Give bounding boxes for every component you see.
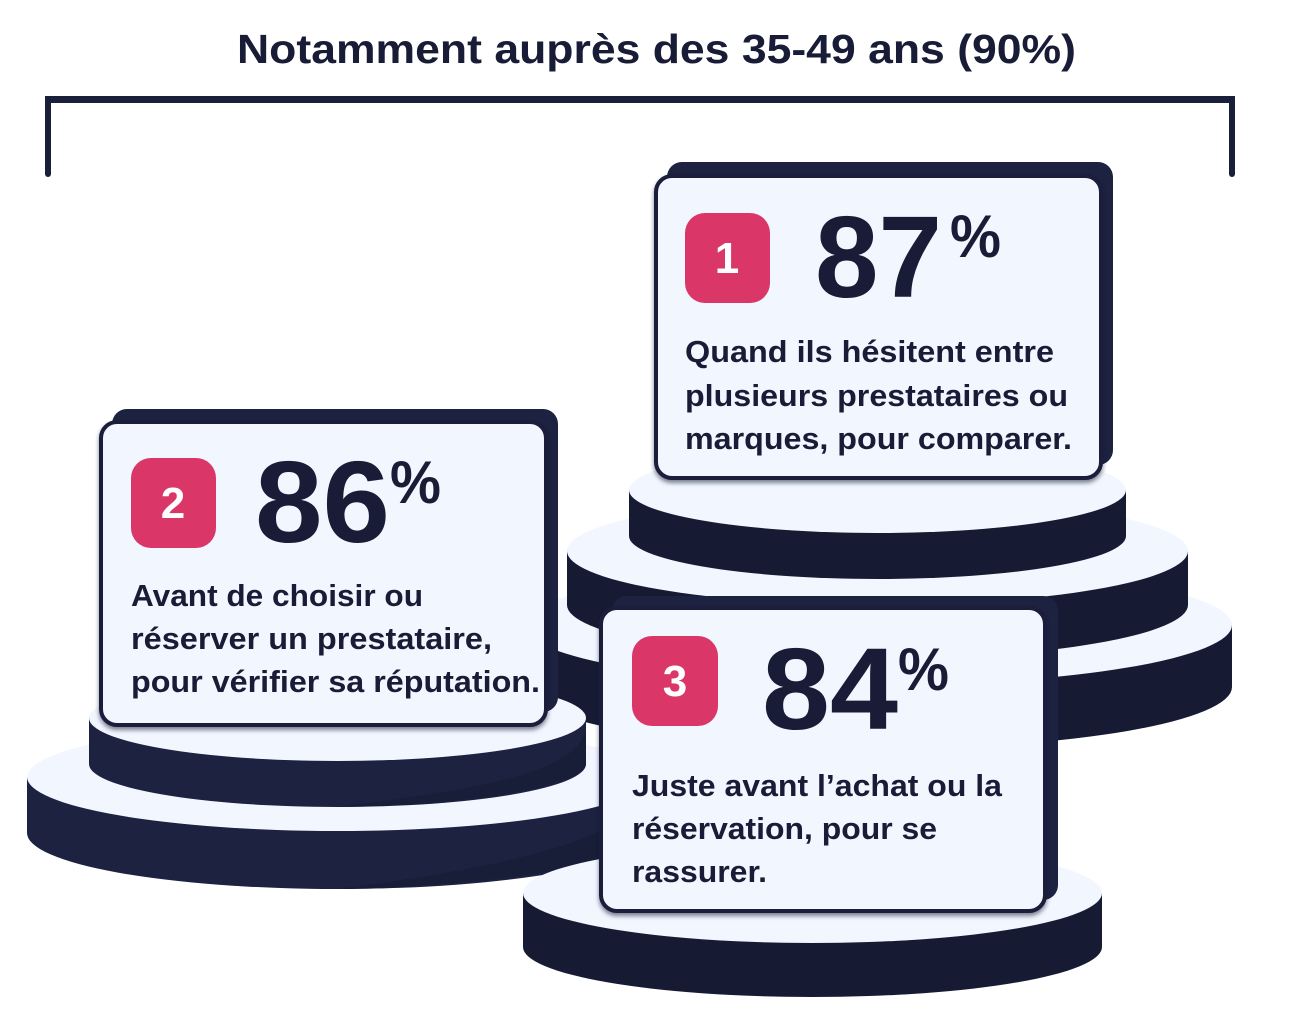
badge 2 number: 2	[161, 479, 185, 528]
card 3 description: rassurer.	[632, 854, 767, 889]
card 2 description: réserver un prestataire,	[131, 621, 492, 656]
card 2 description	[131, 578, 540, 699]
podium: second place stack	[27, 675, 648, 889]
badge 2	[131, 458, 216, 548]
statistic 87: 87	[815, 192, 942, 322]
percent sign 2: %	[390, 449, 441, 516]
card 3 front panel	[601, 608, 1045, 911]
card 2 description: Avant de choisir ou	[131, 578, 423, 613]
card 3 description: réservation, pour se	[632, 811, 937, 846]
card 2 front panel	[101, 422, 546, 725]
title: Notamment auprès des 35-49 ans (90%)	[237, 26, 1076, 72]
card 1 description	[685, 334, 1072, 456]
badge 1 number: 1	[715, 234, 739, 283]
percent sign 1: %	[950, 203, 1001, 270]
card 2 description: pour vérifier sa réputation.	[131, 664, 540, 699]
card 1 back panel	[667, 162, 1113, 465]
card 3	[601, 596, 1058, 911]
badge 3 number: 3	[663, 657, 687, 706]
statistic 86: 86	[255, 437, 390, 567]
percent sign 3: %	[898, 636, 949, 703]
card 1 description: Quand ils hésitent entre	[685, 334, 1054, 369]
card 1 description: plusieurs prestataires ou	[685, 378, 1068, 413]
card 1 front panel	[656, 176, 1101, 478]
card 3 description: Juste avant l’achat ou la	[632, 768, 1003, 803]
card 3 back panel	[612, 596, 1058, 900]
podium: first place stack	[523, 447, 1232, 749]
badge 1	[685, 213, 770, 303]
bracket	[45, 96, 1235, 177]
podium: third place disc	[523, 843, 1102, 997]
card 1	[656, 162, 1113, 478]
badge 3	[632, 636, 718, 726]
card 2 back panel	[112, 409, 558, 712]
card 1 description: marques, pour comparer.	[685, 421, 1072, 456]
card 3 description	[632, 768, 1003, 889]
statistic 84: 84	[762, 624, 898, 754]
card 2	[101, 409, 558, 725]
